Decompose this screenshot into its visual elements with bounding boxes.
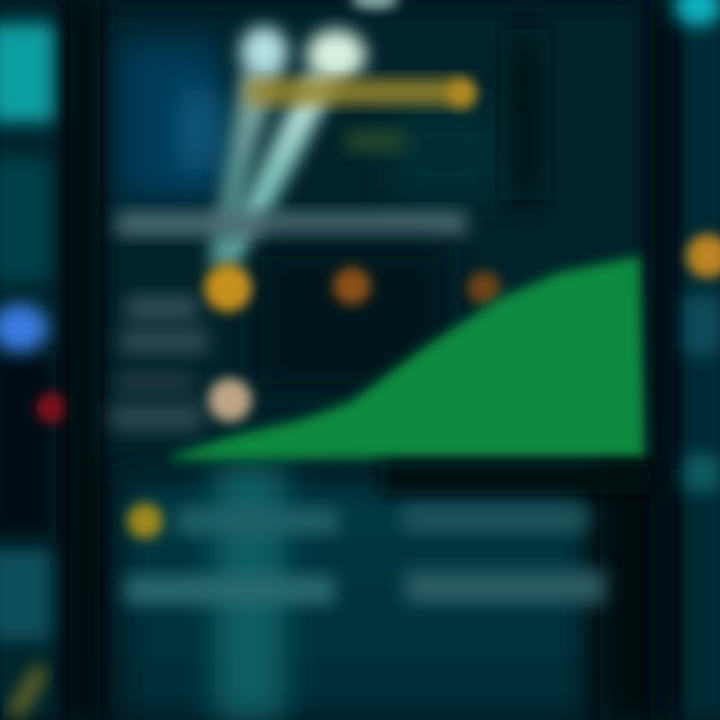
list text lines at left [110,296,208,431]
dark vertical divider [70,0,100,720]
lower text blocks [125,506,605,604]
pale marker [208,378,252,422]
icon: orange marker [686,234,720,278]
subtitle [345,130,405,152]
light beams [208,0,399,272]
bullet icon [127,503,163,539]
right column panel [650,0,720,720]
title bar [246,78,477,108]
left column panel [0,0,68,720]
heading text line [116,212,466,236]
chart area shadow [250,245,450,395]
icon: blue light [0,304,48,352]
icon: yellow diagonal mark [14,668,42,716]
icon: red light [36,392,68,424]
dark band below chart [380,464,650,494]
green area chart [170,256,645,460]
markers row [204,264,501,312]
